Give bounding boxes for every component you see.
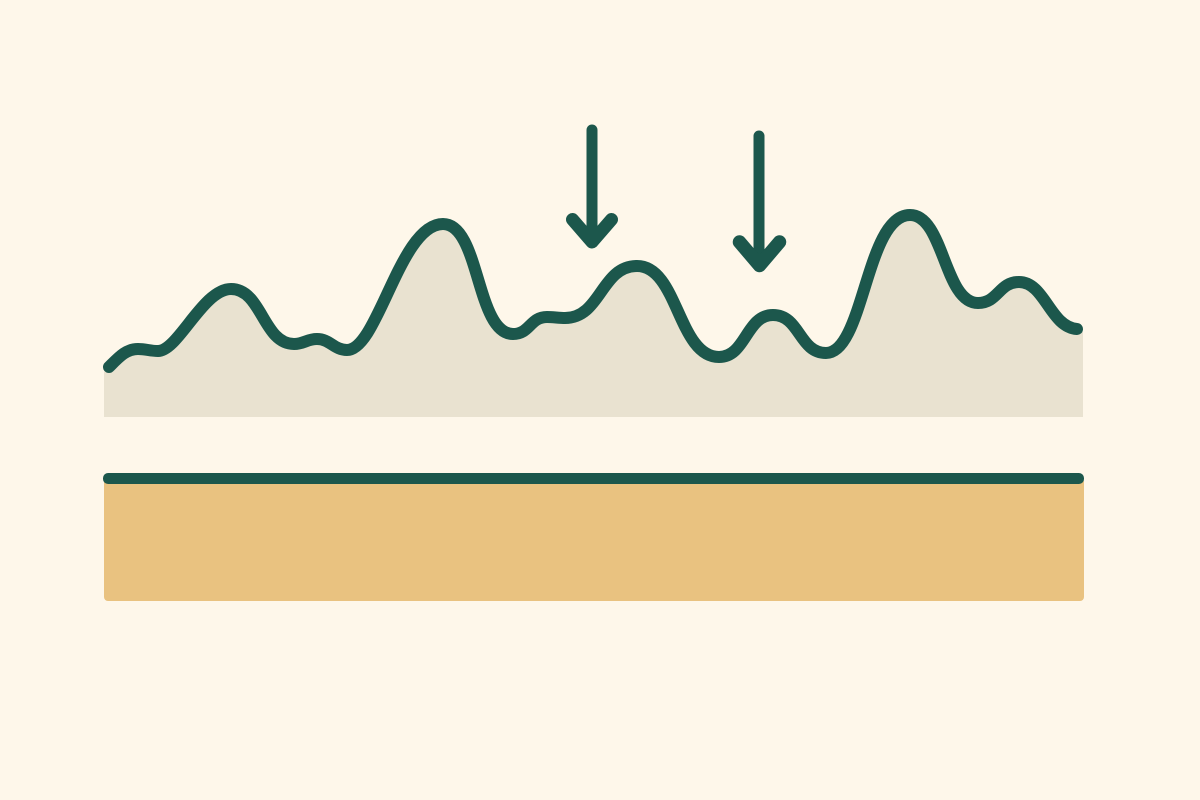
arrow: left — [572, 130, 612, 242]
yellow base block — [104, 478, 1084, 601]
horizontal dark line — [103, 473, 1084, 484]
wavy line — [109, 215, 1077, 367]
arrow: right — [740, 136, 780, 266]
area under wavy line — [104, 215, 1083, 417]
